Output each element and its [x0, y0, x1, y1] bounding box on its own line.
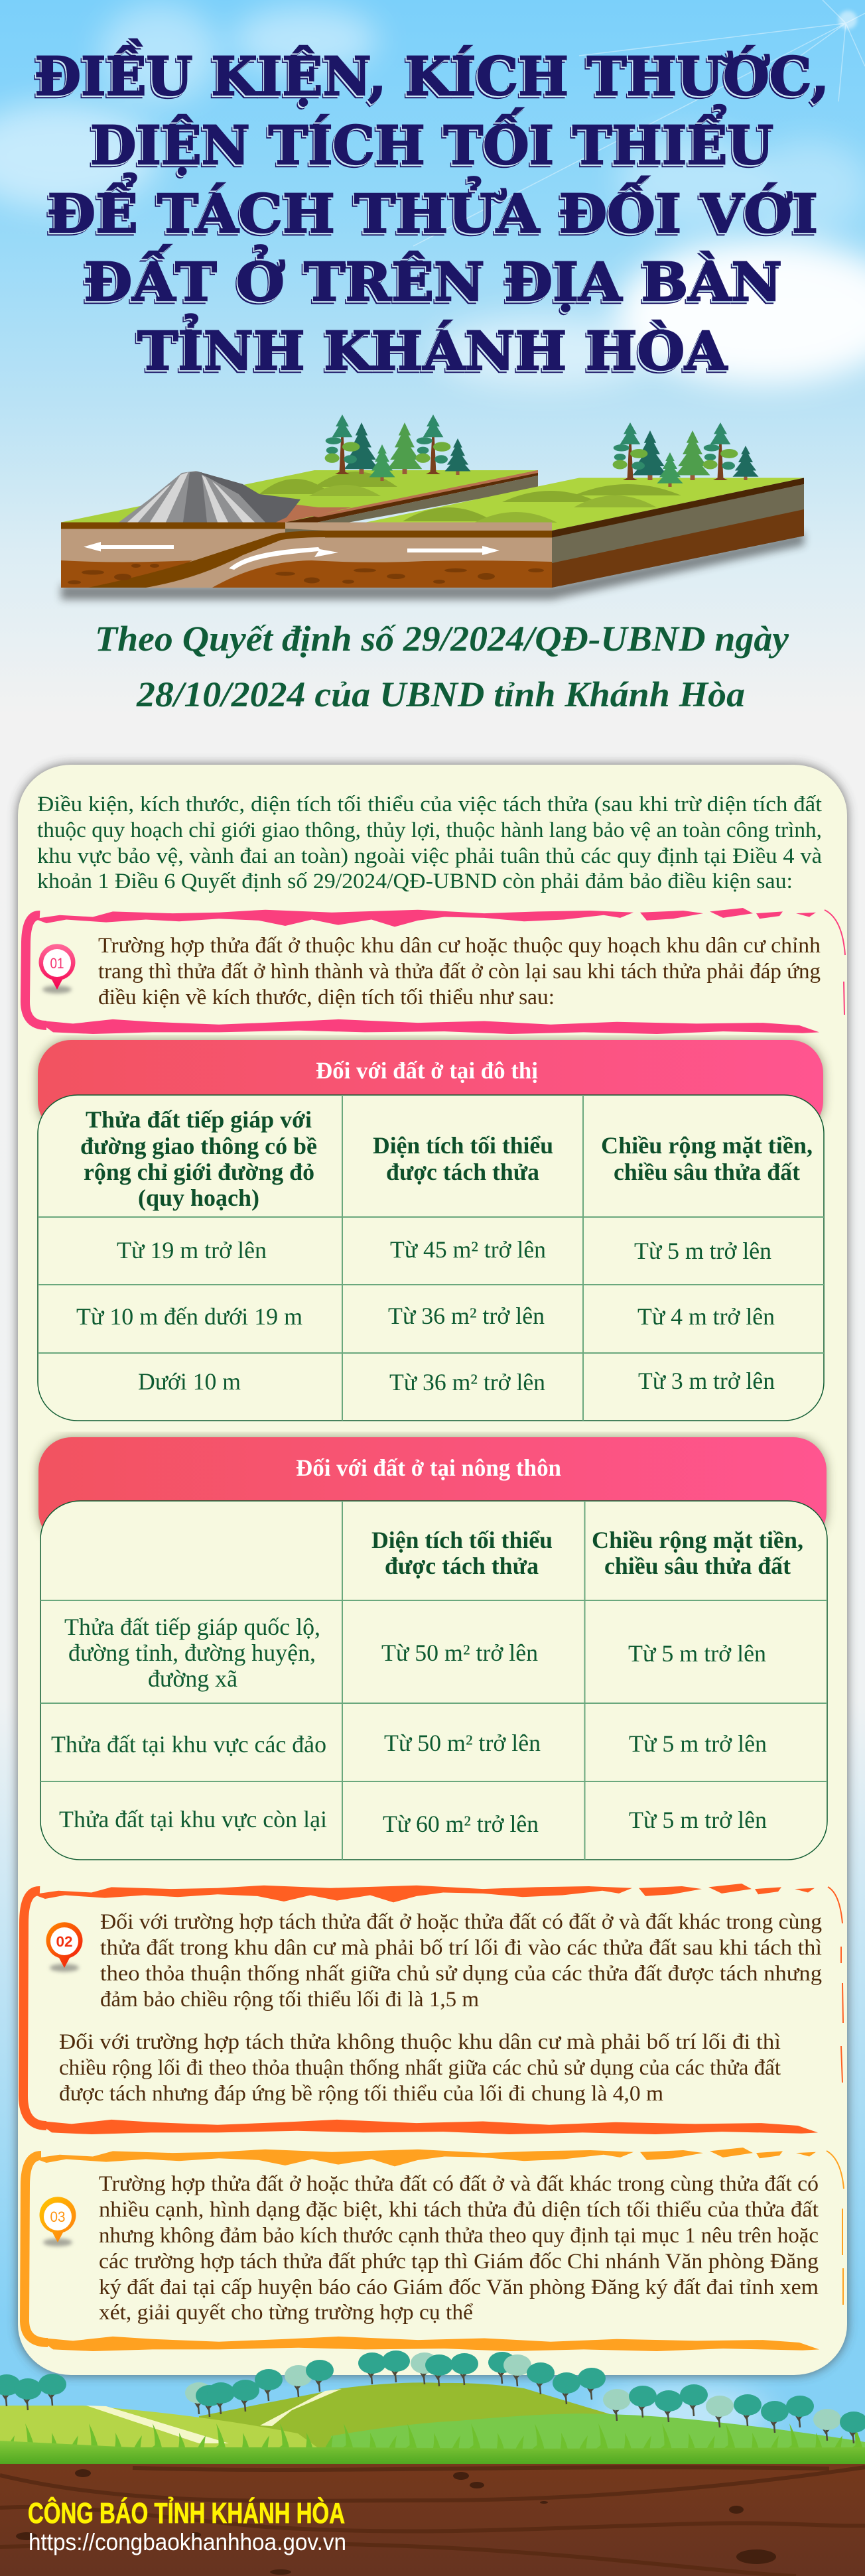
- pink brush frame: [25, 908, 845, 1034]
- footer url: https://congbaokhanhhoa.gov.vn: [29, 2528, 346, 2555]
- soil: [0, 2464, 865, 2576]
- rural data rows: Từ 60 m² trở lên: [383, 1811, 539, 1837]
- urban header row: Thửa đất tiếp giáp với: [86, 1106, 312, 1133]
- intro text: [37, 793, 822, 893]
- callout 03: [25, 2148, 844, 2351]
- amber brush frame: [25, 2148, 844, 2351]
- intro text: thuộc quy hoạch chỉ giới giao thông, thủy lợi, thuộc hành lang bảo vệ an toàn công trình,: [37, 818, 822, 842]
- urban data rows: [76, 1236, 775, 1395]
- callout text 02: [59, 1910, 822, 2106]
- title: [34, 38, 829, 382]
- title: ĐẤT Ở TRÊN ĐỊA BÀN: [84, 244, 782, 313]
- table body: [40, 1501, 827, 1860]
- table header band: Đối với đất ở tại đô thị: [316, 1057, 538, 1084]
- grass: [0, 2421, 865, 2465]
- subtitle: Theo Quyết định số 29/2024/QĐ-UBND ngày: [95, 619, 789, 659]
- title: ĐIỀU KIỆN, KÍCH THƯỚC,: [34, 38, 829, 107]
- mounds on left block: [259, 472, 397, 496]
- urban header row: Chiều rộng mặt tiền,: [601, 1132, 813, 1159]
- rural header row: Chiều rộng mặt tiền,: [592, 1527, 803, 1553]
- callout text 03: nhưng không đảm bảo kích thước cạnh thửa theo quy định tại mục 1 nêu trên hoặc: [99, 2224, 819, 2248]
- callout 01: [25, 908, 845, 1034]
- intro text: Điều kiện, kích thước, diện tích tối thiểu của việc tách thửa (sau khi trừ diện tích đất: [37, 793, 822, 816]
- urban data rows: Từ 45 m² trở lên: [390, 1236, 546, 1263]
- table: rural land: [38, 1437, 827, 1860]
- illustration: geological fault landscape: [61, 415, 804, 600]
- rural data rows: Từ 50 m² trở lên: [381, 1640, 538, 1666]
- callout text 02: thửa đất trong khu dân cư mà phải bố trí lối đi vào các thửa đất sau khi tách thì: [100, 1936, 822, 1960]
- arrow right: [407, 546, 499, 555]
- table header band: Đối với đất ở tại nông thôn: [296, 1454, 561, 1481]
- rural data rows: đường xã: [148, 1665, 237, 1692]
- footer brand: CÔNG BÁO TỈNH KHÁNH HÒA: [28, 2496, 345, 2530]
- ground: hills, grass and soil: [0, 2382, 865, 2576]
- mountain: [119, 471, 300, 523]
- urban header row: chiều sâu thửa đất: [614, 1159, 800, 1185]
- table header band: [38, 1437, 827, 1545]
- rural data rows: Thửa đất tại khu vực còn lại: [59, 1806, 327, 1833]
- table body: [38, 1095, 824, 1421]
- callout text 03: ký đất đai tại cấp huyện báo cáo Giám đốc Văn phòng Đăng ký đất đai tỉnh xem: [99, 2276, 819, 2299]
- pin 03: 03: [50, 2209, 65, 2225]
- road right: [260, 2389, 342, 2426]
- intro text: khu vực bảo vệ, vành đai an toàn) ngoài việc phải tuân thủ các quy định tại Điều 4 và: [37, 844, 822, 868]
- rural header row: chiều sâu thửa đất: [604, 1553, 791, 1579]
- mounds on right block: [403, 484, 681, 523]
- main panel: [18, 765, 847, 2375]
- callout text 01: điều kiện về kích thước, diện tích tối thiểu như sau:: [98, 986, 555, 1009]
- left block top surface: [61, 470, 538, 523]
- pin 02: 02: [56, 1933, 73, 1950]
- callout text 01: [98, 934, 821, 1009]
- callout text 01: trang thì thửa đất ở hình thành và thửa đất ở còn lại sau khi tách thửa phải đáp ứng: [98, 960, 821, 984]
- rural data rows: Từ 5 m trở lên: [628, 1640, 766, 1667]
- urban data rows: Từ 36 m² trở lên: [389, 1369, 545, 1395]
- urban data rows: Từ 10 m đến dưới 19 m: [76, 1303, 302, 1330]
- urban header row: (quy hoạch): [138, 1185, 259, 1211]
- rural header row: Diện tích tối thiểu: [371, 1527, 553, 1553]
- callout text 03: Trường hợp thửa đất ở hoặc thửa đất có đất ở và đất khác trong cùng thửa đất có: [99, 2172, 819, 2196]
- tree line on the hills: [0, 2351, 865, 2443]
- callout text 02: theo thỏa thuận thống nhất giữa chủ sử dụng của các thửa đất được tách nhưng: [100, 1962, 822, 1986]
- callout text 02: đảm bảo chiều rộng tối thiểu lối đi là 1,5 m: [100, 1988, 479, 2012]
- callout text 03: nhiều cạnh, hình dạng đặc biệt, khi tách thửa đủ diện tích tối thiểu của thửa đất: [99, 2198, 819, 2222]
- sun rays: [413, 0, 865, 246]
- urban header row: [80, 1106, 813, 1211]
- left block back layers: [285, 470, 538, 534]
- urban data rows: Từ 5 m trở lên: [634, 1238, 771, 1264]
- front face: [61, 523, 552, 588]
- callout text 02: chiều rộng lối đi theo thỏa thuận thống nhất giữa các chủ sử dụng của các thửa đất: [59, 2056, 781, 2080]
- terracotta landslide: [275, 504, 352, 523]
- arrow curved: [229, 547, 338, 570]
- rural data rows: Từ 50 m² trở lên: [384, 1730, 541, 1756]
- subtitle: [95, 619, 789, 714]
- callout text 03: các trường hợp tách thửa đất phức tạp thì Giám đốc Chi nhánh Văn phòng Đăng: [99, 2250, 819, 2274]
- rural data rows: đường tỉnh, đường huyện,: [68, 1640, 316, 1666]
- urban header row: đường giao thông có bề: [80, 1133, 317, 1159]
- urban data rows: Từ 4 m trở lên: [637, 1303, 775, 1330]
- rural data rows: Từ 5 m trở lên: [629, 1807, 767, 1833]
- callout text 02: Đối với trường hợp tách thửa không thuộc khu dân cư mà phải bố trí lối đi thì: [59, 2030, 781, 2054]
- pin 02: [46, 1922, 82, 1972]
- callout text 01: Trường hợp thửa đất ở thuộc khu dân cư hoặc thuộc quy hoạch khu dân cư chỉnh: [98, 934, 821, 958]
- rural data rows: Thửa đất tiếp giáp quốc lộ,: [64, 1614, 320, 1640]
- callout text 03: [99, 2172, 819, 2325]
- rural data rows: Từ 5 m trở lên: [629, 1730, 767, 1757]
- title: DIỆN TÍCH TỐI THIỂU: [90, 104, 773, 176]
- title: ĐỂ TÁCH THỬA ĐỐI VỚI: [47, 172, 818, 245]
- callout text 02: Đối với trường hợp tách thửa đất ở hoặc thửa đất có đất ở và đất khác trong cùng: [100, 1910, 822, 1934]
- urban data rows: Từ 36 m² trở lên: [388, 1303, 545, 1329]
- table header band: [38, 1040, 823, 1134]
- callout text 02: được tách nhưng đáp ứng bề rộng tối thiểu của lối đi chung là 4,0 m: [59, 2082, 663, 2106]
- pine trees: [325, 415, 759, 487]
- urban data rows: Từ 3 m trở lên: [638, 1368, 775, 1394]
- table: urban land: [38, 1040, 824, 1421]
- rural header row: [371, 1527, 803, 1579]
- title: TỈNH KHÁNH HÒA: [137, 313, 728, 382]
- urban data rows: Từ 19 m trở lên: [117, 1237, 267, 1263]
- rural data rows: [51, 1614, 767, 1837]
- intro text: khoản 1 Điều 6 Quyết định số 29/2024/QĐ-UBND còn phải đảm bảo điều kiện sau:: [37, 869, 793, 893]
- urban header row: rộng chỉ giới đường đỏ: [84, 1159, 314, 1185]
- subtitle: 28/10/2024 của UBND tỉnh Khánh Hòa: [136, 675, 745, 714]
- right block top surface: [326, 478, 804, 531]
- right side layers: [552, 478, 804, 588]
- rural data rows: Thửa đất tại khu vực các đảo: [51, 1731, 326, 1758]
- rural header row: được tách thửa: [385, 1553, 539, 1579]
- pin 01: [38, 944, 75, 994]
- pin 03: [39, 2197, 76, 2246]
- arrow left: [84, 542, 174, 552]
- callout 02: [23, 1884, 843, 2134]
- urban header row: được tách thửa: [386, 1159, 539, 1185]
- orange brush frame: [23, 1884, 843, 2134]
- road left: [86, 2406, 229, 2443]
- urban header row: Diện tích tối thiểu: [373, 1132, 553, 1159]
- callout text 03: xét, giải quyết cho từng trường hợp cụ thể: [99, 2301, 473, 2325]
- pin 01: 01: [50, 955, 64, 972]
- urban data rows: Dưới 10 m: [138, 1368, 241, 1395]
